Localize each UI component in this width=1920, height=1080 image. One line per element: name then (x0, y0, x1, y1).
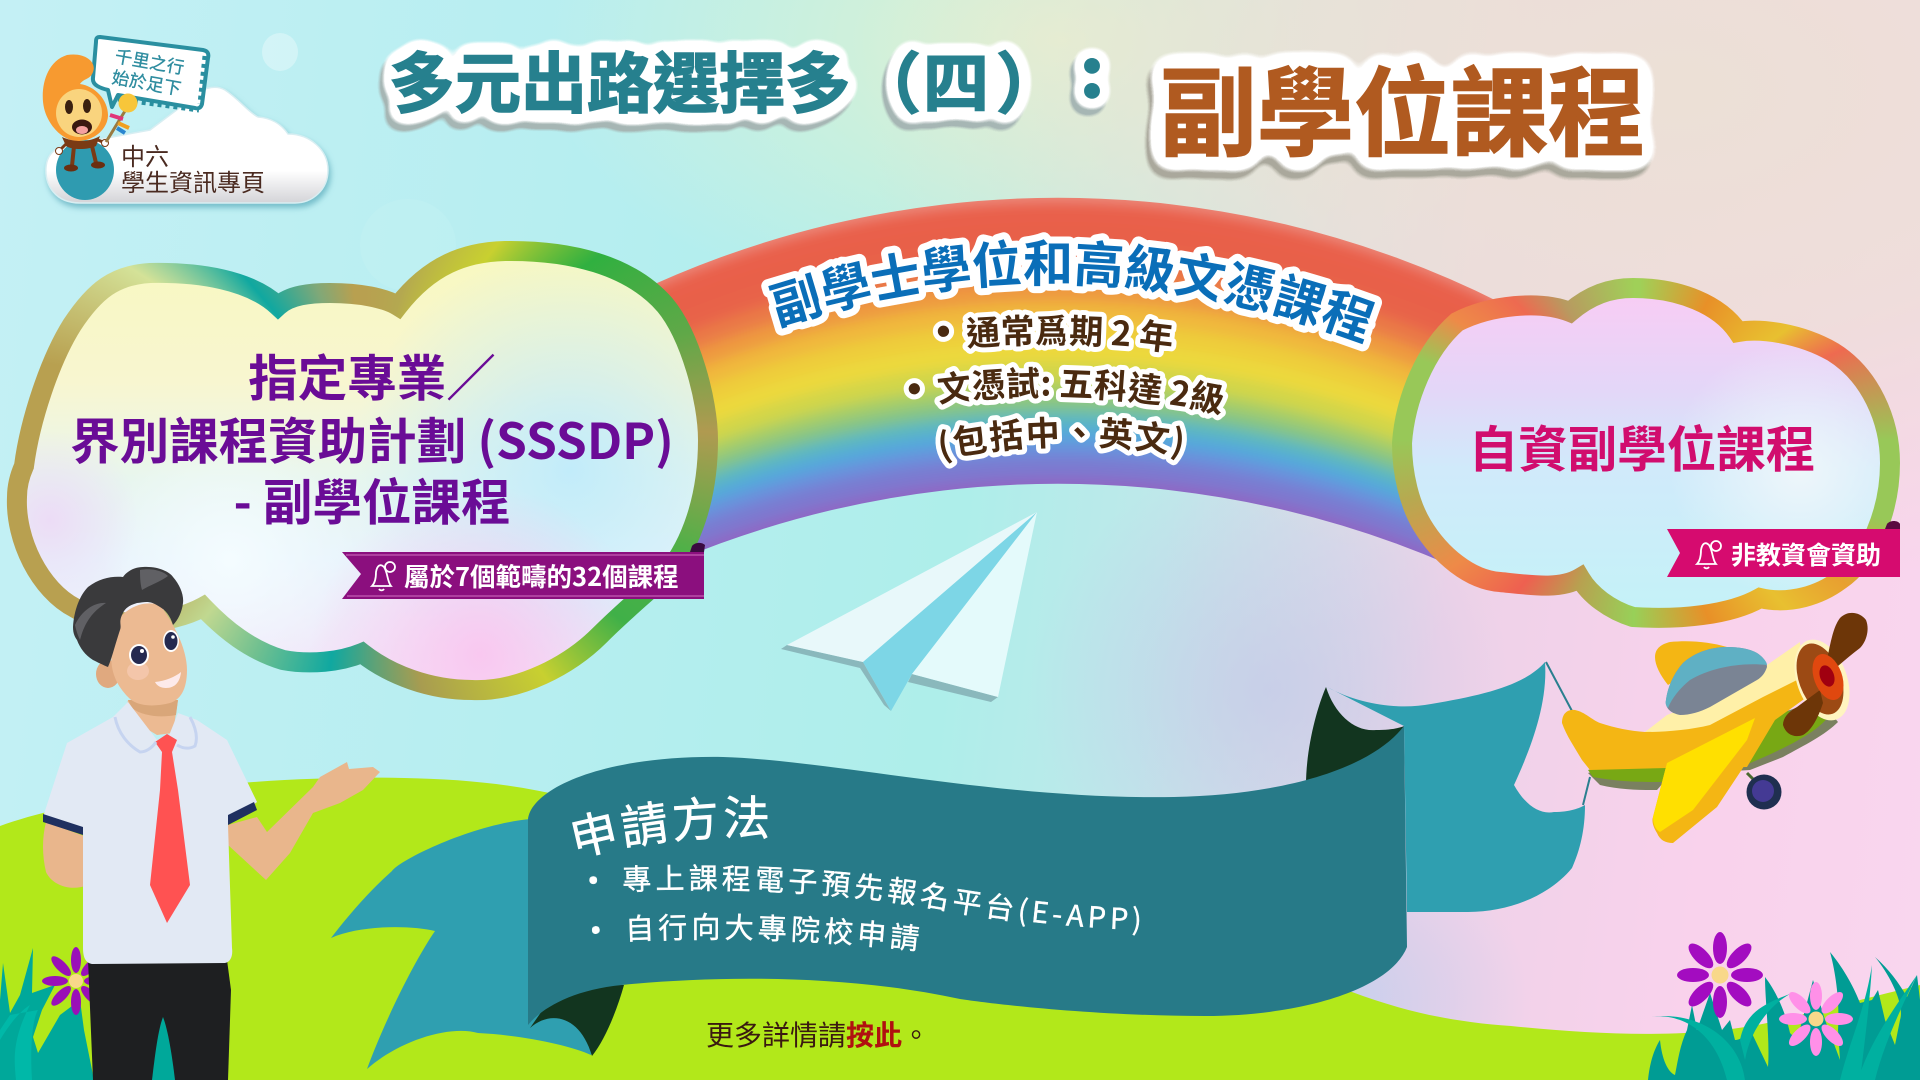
plane cream stripe (1645, 642, 1803, 732)
ribbon right tail (1327, 662, 1585, 912)
ribbon fold right (1306, 687, 1404, 785)
ribbon heading: 申請方法 (572, 795, 768, 856)
speech bubble (93, 37, 208, 110)
tag: 32 programmes (342, 543, 705, 599)
man back arm (43, 822, 88, 888)
ribbon string (1546, 662, 1590, 805)
logo (43, 37, 328, 203)
ribbon left tail (331, 819, 622, 1069)
man tie (150, 734, 190, 923)
plane tail fin (1655, 641, 1727, 685)
man hair highlight (75, 569, 168, 640)
man shirt (43, 702, 257, 964)
icon: bell (1697, 541, 1721, 568)
heading: SSSDP (70, 340, 674, 535)
mascot (43, 54, 138, 172)
man collar (115, 717, 196, 752)
speech bubble: 千里之行 (113, 43, 186, 80)
plane wheel (1746, 773, 1782, 810)
ribbon list: • 自行向大專院校申請 (592, 912, 920, 952)
heading: SSSDP: - 副學位課程 (233, 464, 511, 535)
paper plane (781, 512, 1037, 711)
right grass (1648, 952, 1920, 1080)
plane olive underside (1588, 700, 1838, 790)
plane body (1562, 677, 1807, 770)
grass hill (0, 778, 1920, 1080)
title: line one: 四 (923, 31, 989, 127)
man ear (96, 660, 120, 688)
rainbow heading: 副學士學位和高級文憑課程 (761, 232, 1382, 352)
logo text (121, 137, 265, 198)
man neck (125, 700, 178, 735)
man cheek (127, 662, 149, 680)
heading: self-financed: 自資副學位課程 (1469, 411, 1815, 482)
man hair (73, 567, 183, 667)
man face (111, 603, 187, 705)
plane wing (1652, 717, 1770, 843)
ribbon fold left (530, 985, 624, 1056)
man eyes (129, 644, 149, 666)
footer note: 更多詳情請按此。 (706, 1014, 930, 1054)
ribbon (331, 662, 1591, 1069)
logo text: 學生資訊專頁 (121, 163, 265, 198)
tag: non-UGC funded: 非教資會資助 (1731, 536, 1881, 572)
right purple flower (1677, 932, 1763, 1018)
plane green belly (1588, 710, 1830, 782)
heading: SSSDP: 界別課程資助計劃 (SSSDP) (70, 403, 674, 474)
rainbow bullets (904, 309, 1228, 469)
icon: bell (372, 562, 395, 590)
tag: 32 programmes: 屬於7個範疇的32個課程 (404, 557, 679, 594)
plane cockpit (1666, 647, 1767, 715)
man sleeves (43, 802, 257, 835)
ribbon main (528, 726, 1407, 1025)
rainbow arch (656, 198, 1494, 560)
title: line one: ： (1066, 38, 1118, 113)
man (43, 567, 380, 1080)
rainbow bullets: •文憑試: 五科達 2級 (904, 362, 1228, 420)
rainbow bullets: (包括中、英文) (936, 412, 1187, 469)
rainbow bullets: •通常爲期 2 年 (932, 309, 1177, 358)
tag: non-UGC funded (1667, 521, 1900, 577)
panel: SSSDP cloud (0, 220, 740, 710)
logo cloud (46, 87, 328, 203)
title: line one: （ (855, 31, 921, 127)
logo text: 中六 (121, 137, 169, 172)
background soft circles (262, 33, 456, 291)
plane propeller (1783, 613, 1868, 736)
man pants (88, 960, 231, 1080)
panel: self-financed cloud (1392, 278, 1900, 628)
logo circle (56, 140, 114, 200)
left grass (0, 948, 94, 1080)
title: line two: 副學位課程 (1160, 35, 1645, 176)
title: line one (389, 31, 1118, 127)
title: line one: 多元出路選擇多 (389, 31, 851, 127)
toy plane (1562, 613, 1868, 843)
ribbon list: • 專上課程電子預先報名平台(E-APP) (589, 864, 1140, 936)
man smile (155, 672, 181, 688)
left flower (42, 947, 110, 1015)
speech bubble: 始於足下 (110, 64, 183, 101)
man front arm (228, 762, 380, 880)
heading: SSSDP: 指定專業／ (248, 340, 496, 411)
right pink flower (1779, 982, 1853, 1056)
title: line one: ） (996, 31, 1062, 127)
